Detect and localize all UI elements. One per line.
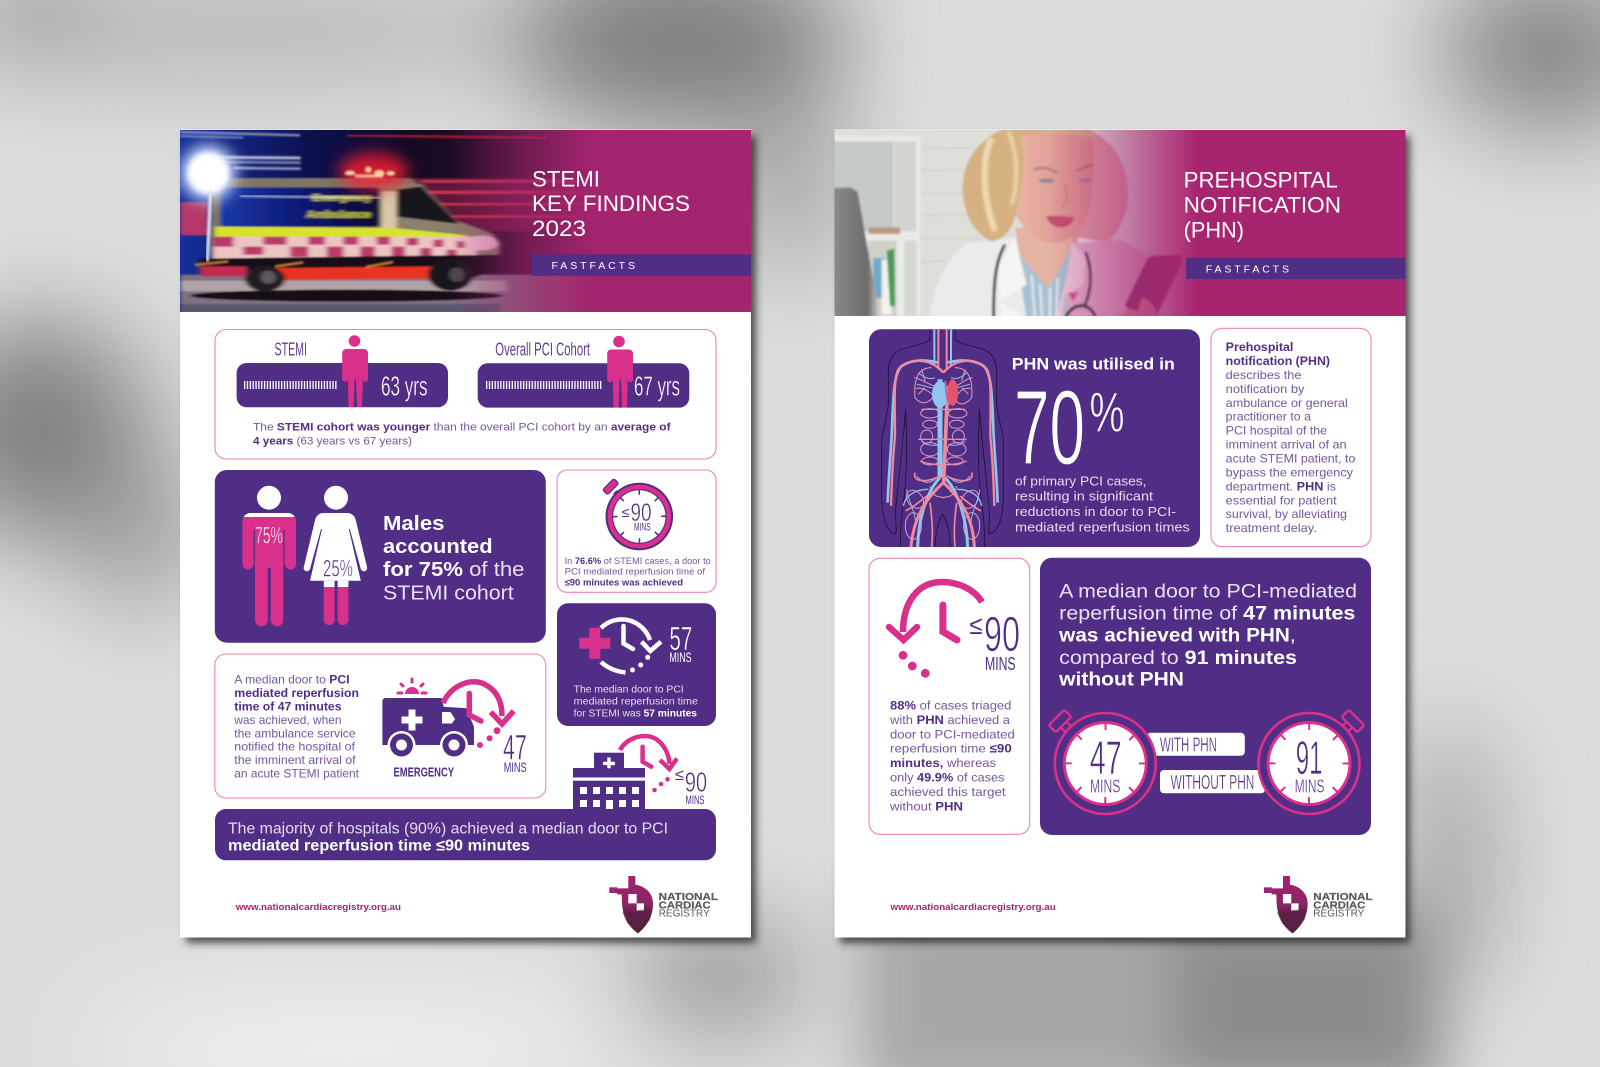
title [1184,167,1341,242]
blurred side lettering: Emergency [313,193,371,204]
text: ambulance notification: was achieved, when [233,714,342,727]
stat: 57 mins: 57 [669,620,692,657]
title: KEY FINDINGS [532,191,690,216]
text: age summary [253,422,671,447]
blurred side lettering: Ambulance [307,209,371,221]
panel: PHN definition: survival, by alleviating [1226,507,1347,521]
text: PCI cases: mediated reperfusion times [1015,519,1190,534]
text: ambulance notification [233,674,360,781]
text: PCI cases: reductions in door to PCI- [1015,504,1176,519]
stat: 47 mins [503,728,527,775]
icon: person [607,336,633,408]
header: doctor photo with title [828,128,1406,321]
panel: left poster [180,128,751,938]
title: 2023 [532,216,586,241]
text: median door: without PHN [1058,669,1184,691]
panel: PHN utilisation 70% [869,329,1200,547]
icon: clock arrow to 47 [443,682,514,748]
panel: PHN definition: notification by [1226,382,1304,396]
panel: PHN definition: essential for patient [1226,493,1337,507]
lungs and intestines [903,368,982,539]
panel: PHN definition: practitioner to a [1226,410,1311,424]
text: median door: A median door to PCI-mediated [1059,581,1357,603]
panel: PHN definition: imminent arrival of an [1226,438,1347,452]
text: median door: was achieved with PHN , [1058,625,1296,647]
text: males accounted: Males [383,513,444,535]
logo: National Cardiac Registry: NATIONAL [659,892,718,903]
illustration: circulatory system [882,329,1003,547]
icon: stopwatch: MINS [634,522,651,534]
logo: National Cardiac Registry: CARDIAC [1313,900,1365,911]
chart: STEMI age bar [237,335,448,407]
text: PCI cases: resulting in significant [1015,489,1153,504]
pill: with PHN: WITH PHN [1160,735,1217,757]
text: age summary: 4 years (63 years vs 67 years) [253,435,412,447]
fastfacts bar: FASTFACTS [1206,263,1289,275]
stat: 57 mins [669,620,692,665]
chart: STEMI age bar: STEMI [274,339,307,360]
banner: majority of hospitals: The majority of hospitals (90%) achieved a median door to PCI [228,820,668,837]
text: ambulance notification: time of 47 minutes [234,700,342,713]
text: 88% of cases: reperfusion time ≤90 [890,742,1012,756]
icon: female figure: 25% [323,556,353,583]
panel: PHN definition: ambulance or general [1226,396,1348,410]
title: (PHN) [1184,217,1244,242]
chart: overall PCI age bar: 67 yrs [634,371,680,402]
panel: 76.6% stopwatch [557,470,716,592]
icon: stopwatch [603,479,673,550]
chart: overall PCI age bar [478,336,689,408]
stat: ≤90 mins [970,608,1020,674]
text: ambulance notification: A median door to PCI [234,674,349,687]
text: median door: compared to 91 minutes [1059,647,1297,669]
text: 57 caption: for STEMI was 57 minutes [574,708,697,719]
stat: ≤90 mins: 90 [984,608,1020,662]
icon: stopwatch 91 mins: 91 [1296,731,1322,784]
fastfacts bar [1186,258,1406,279]
stat: ≤90 mins: MINS [985,654,1016,674]
icon: reverse clock arrow [889,582,982,678]
panel: PHN definition: acute STEMI patient, to [1226,452,1356,466]
icon: stopwatch: ≤ [622,504,630,520]
icon: stopwatch: 90 [630,499,652,527]
logo: National Cardiac Registry [1264,876,1373,933]
chart: overall PCI age bar: Overall PCI Cohort [495,339,590,360]
text: 88% of cases: with PHN achieved a [889,713,1010,727]
stat: 47 mins: 47 [503,728,527,767]
panel: PHN definition: notification (PHN) [1226,354,1330,368]
stat: 47 mins: MINS [504,759,527,775]
heart [932,381,948,408]
text: PHN was utilised in: PHN was utilised in [1012,354,1175,373]
footer url: www.nationalcardiacregistry.org.au [889,902,1056,913]
page shadows [186,136,1410,943]
title: PREHOSPITAL [1184,167,1338,192]
text: males accounted [383,513,524,604]
text: PCI cases [1015,473,1190,534]
text: 88% of cases: achieved this target [890,785,1006,799]
text: 88% of cases: without PHN [889,799,963,813]
stat: 57 mins: MINS [669,649,692,665]
text: median door [1058,581,1357,691]
panel: PHN definition: department. PHN is [1226,479,1336,493]
icon: ambulance [382,679,474,780]
pill: without PHN [1160,770,1265,794]
chart: STEMI age bar: 63 yrs [381,371,428,402]
text: 76.6% caption: ≤90 minutes was achieved [565,578,683,588]
panel: males 75% [215,470,546,643]
text: 57 caption: mediated reperfusion time [574,696,698,707]
panel: PHN definition [1211,328,1371,547]
icon: hospital with clock arrow: MINS [686,795,705,807]
text: PCI cases: of primary PCI cases, [1015,473,1146,488]
logo: National Cardiac Registry: REGISTRY [659,909,710,920]
panel: PHN definition: describes the [1226,368,1302,382]
text: 88% of cases: minutes, whereas [890,756,996,770]
fastfacts bar [532,254,751,276]
text: ambulance notification: the ambulance service [234,727,356,740]
icon: male figure [242,486,296,626]
arteries [891,329,994,547]
panel: 47 vs 91 minutes [1040,558,1371,835]
text: 76.6% caption: In 76.6% of STEMI cases, a door to [565,556,711,566]
panel: age comparison [215,330,716,459]
text: 88% of cases [889,699,1015,813]
logo: National Cardiac Registry: NATIONAL [1313,892,1373,903]
stat: 70%: 70 [1014,369,1085,487]
panel: PHN definition: treatment delay. [1226,521,1317,535]
icon: stopwatch 91 mins: MINS [1295,775,1324,796]
panel: 88% clock [869,558,1030,834]
text: ambulance notification: mediated reperfusion [234,687,359,700]
stat: ≤90 mins: ≤ [970,610,982,640]
panel: ambulance 47 minutes [215,654,546,798]
panel: PHN definition: bypass the emergency [1226,465,1353,479]
text: 88% of cases: 88% of cases triaged [890,699,1012,713]
banner: majority of hospitals: mediated reperfusion time ≤90 minutes [228,837,530,854]
text: ambulance notification: the imminent arrival of [234,754,356,767]
image: speeding ambulance [180,130,582,312]
icon: stopwatch 47 mins [1049,710,1156,814]
text: 76.6% caption: PCI mediated reperfusion time of [565,567,705,577]
text: males accounted: accounted [383,536,493,558]
icon: male figure: 75% [255,522,283,549]
title: NOTIFICATION [1184,192,1341,217]
text: median door: reperfusion time of 47 minutes [1059,603,1356,625]
icon: person [342,335,368,407]
logo: National Cardiac Registry: REGISTRY [1313,909,1365,920]
logo: National Cardiac Registry: CARDIAC [659,900,711,911]
text: 76.6% caption [565,556,711,588]
image: doctor reading phone [834,130,1192,316]
left hair [963,128,1023,241]
footer url: www.nationalcardiacregistry.org.au [235,902,401,913]
text: males accounted: STEMI cohort [383,582,514,604]
text: age summary: The STEMI cohort was younger than the overall PCI cohort by an average of [253,422,671,434]
icon: stopwatch 91 mins [1258,710,1364,814]
face [1008,128,1094,243]
text: ambulance notification: notified the hospital of [234,741,356,754]
title [532,166,690,241]
icon: cross clock [579,619,661,672]
panel: PHN definition: PCI hospital of the [1226,424,1327,438]
right hair [1070,132,1128,244]
panel: right poster [828,128,1406,938]
text: 57 caption: The median door to PCI [574,685,684,696]
text: 57 caption [574,685,698,719]
stat: 70%: % [1090,381,1124,445]
text: 88% of cases: door to PCI-mediated [890,727,1015,741]
icon: hospital with clock arrow [573,736,707,810]
panel: PHN definition: Prehospital [1226,340,1293,354]
icon: ambulance: EMERGENCY [394,765,454,780]
icon: stopwatch 47 mins: MINS [1090,775,1120,796]
text: males accounted: for 75% of the [383,559,524,581]
blurred side lettering [307,193,371,221]
logo: National Cardiac Registry [609,876,718,933]
header: ambulance photo with title [180,128,751,315]
icon: hospital with clock arrow: ≤ [675,767,684,784]
text: ambulance notification: an acute STEMI patient [234,768,360,781]
pill: without PHN: WITHOUT PHN [1171,772,1254,794]
banner: majority of hospitals [215,809,716,860]
icon: hospital with clock arrow: 90 [685,767,707,798]
icon: female figure [304,486,367,625]
icon: stopwatch 47 mins: 47 [1090,731,1122,784]
fastfacts bar: FASTFACTS [552,260,635,272]
coat [930,237,1098,316]
panel: 57 minutes [557,603,716,726]
text: 88% of cases: only 49.9% of cases [890,771,1004,785]
veins [888,329,998,547]
title: STEMI [532,166,600,192]
